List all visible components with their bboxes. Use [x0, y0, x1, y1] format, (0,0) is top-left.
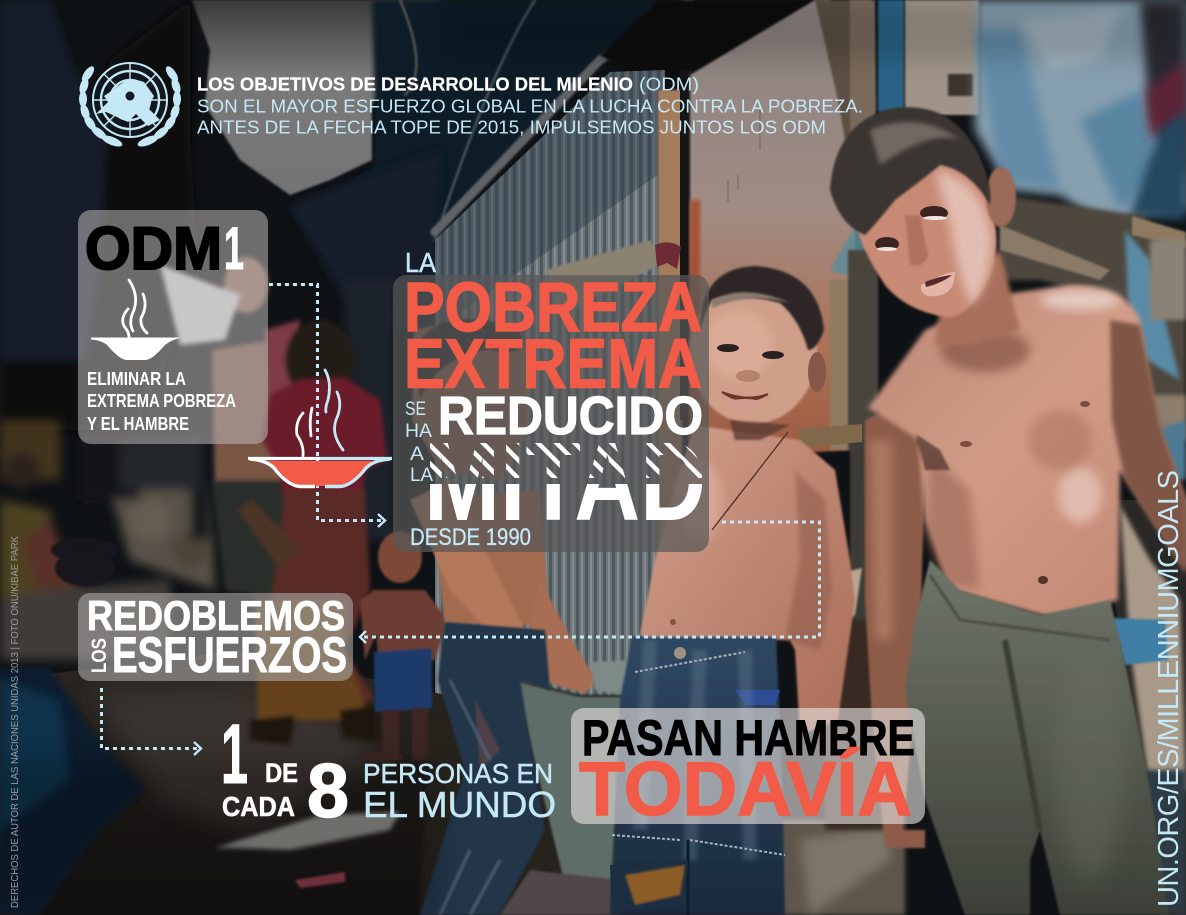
rust wall: [690, 0, 860, 460]
panel: main headline: DESDE 1990: [410, 524, 531, 551]
arrow: dotted to statistic: [102, 688, 201, 755]
icon: white bowl: [91, 280, 181, 360]
header text: LOS OBJETIVOS DE DESARROLLO DEL MILENIO: [197, 74, 633, 94]
big boy: [830, 107, 1186, 915]
corrugated wall: [435, 70, 665, 720]
head: [858, 139, 996, 317]
text: goal name: [87, 369, 236, 434]
head: [689, 280, 817, 424]
text: se ha reducido a la mitad: SE: [405, 399, 426, 420]
text: goal name: ELIMINAR LA: [87, 369, 186, 389]
statistic: 1 de cada 8 personas en el mundo: EL MUNDO: [363, 784, 556, 825]
dark triangle over wall: [600, 0, 815, 85]
icon: hunger bowl half full: [248, 370, 392, 486]
text: copyright credit: DERECHOS DE AUTOR DE LAS NACIONES UNIDAS 2013 | FOTO ONU/KIBAE PARK: [9, 536, 21, 908]
statistic: 1 de cada 8 personas en el mundo: [221, 707, 556, 834]
panel: main headline: [393, 247, 709, 552]
middle boy: [610, 266, 855, 915]
heading: POBREZA EXTREMA: EXTREMA: [404, 324, 702, 402]
back boy jeans: [420, 622, 550, 915]
torso: [868, 285, 1186, 620]
blurred man: [160, 257, 300, 600]
statistic: 1 de cada 8 personas en el mundo: 1: [221, 707, 248, 801]
torso: [640, 425, 855, 735]
panel: pasan hambre todavia: PASAN HAMBRE: [582, 710, 915, 766]
header text: ANTES DE LA FECHA TOPE DE 2015, IMPULSEMOS JUNTOS LOS ODM: [197, 118, 826, 138]
statistic: 1 de cada 8 personas en el mundo: DE: [265, 758, 298, 788]
underside of roof: [290, 0, 660, 330]
heading: ODM1: 1: [224, 215, 244, 282]
arrow: dotted from main panel to redoblemos: [360, 522, 820, 643]
header text: SON EL MAYOR ESFUERZO GLOBAL EN LA LUCHA CONTRA LA POBREZA.: [197, 96, 863, 116]
bamboo pole: [658, 90, 682, 650]
text: se ha reducido a la mitad: HA: [405, 421, 432, 442]
blue tarp bottom-left: [0, 668, 145, 915]
panel: redoblemos los esfuerzos: [78, 592, 353, 683]
back boy: [410, 318, 596, 694]
wall below-right of the bucket: [780, 820, 905, 915]
text: se ha reducido a la mitad: MITAD: [424, 419, 706, 544]
ground beside bucket: [420, 700, 625, 915]
far arm behind pants: [865, 400, 925, 848]
small child: [360, 531, 447, 762]
heading: ODM1: ODM: [85, 215, 222, 282]
header text: (ODM): [639, 74, 699, 94]
text: se ha reducido a la mitad: A: [410, 444, 424, 465]
statistic: 1 de cada 8 personas en el mundo: 8: [307, 749, 349, 834]
bucket: [515, 660, 630, 885]
panel: pasan hambre todavia: TODAVÍA: [579, 747, 912, 832]
jeans: [610, 637, 785, 915]
heading: POBREZA EXTREMA: [404, 268, 702, 402]
left stall goods, woman and pots: [0, 420, 215, 660]
tarp and clutter on the right: [975, 0, 1186, 235]
text: se ha reducido a la mitad: MITAD: [424, 419, 706, 544]
text: goal name: Y EL HAMBRE: [87, 414, 189, 434]
text: se ha reducido a la mitad: LA: [410, 465, 433, 486]
panel: redoblemos los esfuerzos: ESFUERZOS: [112, 627, 347, 683]
panel: pasan hambre todavia: [571, 708, 925, 832]
sky gap: [192, 0, 440, 195]
heading: POBREZA EXTREMA: POBREZA: [404, 268, 702, 346]
panel: main headline: LA: [405, 247, 436, 278]
statistic: 1 de cada 8 personas en el mundo: CADA: [222, 791, 295, 822]
text: website url: UN.ORG/ES/MILLENNIUMGOALS: [1153, 470, 1185, 907]
panel: redoblemos los esfuerzos: LOS: [88, 638, 111, 673]
blurred woman: [238, 320, 387, 745]
panel: redoblemos los esfuerzos: REDOBLEMOS: [87, 592, 345, 639]
panel: ODM1: [78, 210, 268, 444]
top vignette over the photograph: [440, 0, 1186, 60]
text: goal name: EXTREMA POBREZA: [87, 391, 236, 411]
text: se ha reducido a la mitad: [406, 396, 702, 520]
eyes, nose, mouth: [920, 206, 948, 220]
horizontal stick: [799, 424, 862, 448]
arrow: dotted from ODM1 to main panel: [269, 284, 385, 527]
neck: [935, 250, 1020, 345]
trousers: [905, 560, 1170, 915]
icon: UN emblem: [78, 62, 182, 149]
statistic: 1 de cada 8 personas en el mundo: PERSONAS EN: [363, 758, 553, 789]
text: se ha reducido a la mitad: REDUCIDO: [438, 386, 703, 446]
left hanging cloth: [0, 0, 200, 460]
header text: [197, 74, 863, 138]
wood posts: [815, 0, 875, 140]
rafters: [400, 0, 690, 240]
ground: [0, 650, 600, 915]
